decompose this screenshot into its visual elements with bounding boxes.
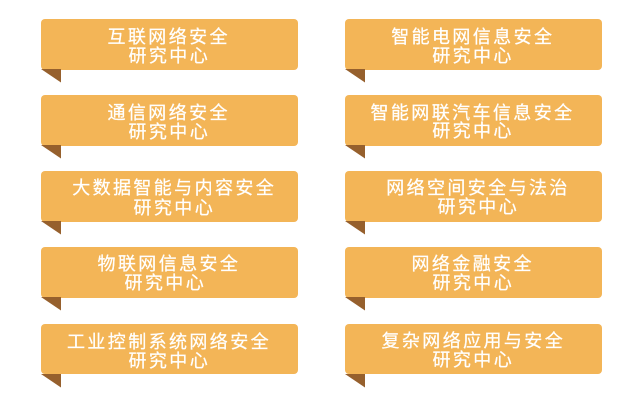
- banner label: 研究中心: [438, 197, 519, 217]
- banner label: [345, 19, 602, 70]
- ribbon fold: [41, 297, 61, 310]
- ribbon fold: [41, 374, 61, 388]
- ribbon fold: [345, 69, 365, 82]
- banner label: [41, 324, 298, 374]
- banner label: 研究中心: [128, 46, 210, 66]
- banner label: [41, 171, 298, 222]
- card: 智能网联汽车信息安全研究中心: [345, 95, 602, 158]
- card: 网络金融安全研究中心: [345, 247, 602, 310]
- card: 互联网络安全研究中心: [41, 19, 298, 82]
- card: 复杂网络应用与安全研究中心: [345, 324, 602, 388]
- card: 通信网络安全研究中心: [41, 95, 298, 158]
- banner label: 网络金融安全: [412, 254, 534, 274]
- banner label: 研究中心: [128, 122, 210, 142]
- card: 物联网信息安全研究中心: [41, 247, 298, 310]
- banner label: 研究中心: [432, 121, 514, 141]
- ribbon fold: [41, 69, 61, 82]
- card: 智能电网信息安全研究中心: [345, 19, 602, 82]
- banner label: 研究中心: [432, 46, 514, 66]
- banner label: 研究中心: [432, 350, 514, 370]
- banner label: 研究中心: [134, 198, 215, 218]
- card: 工业控制系统网络安全研究中心: [41, 324, 298, 388]
- banner label: [345, 95, 602, 146]
- banner label: 研究中心: [124, 273, 206, 293]
- banner label: 智能电网信息安全: [391, 27, 554, 47]
- banner label: [345, 171, 602, 222]
- card: 网络空间安全与法治研究中心: [345, 171, 602, 234]
- ribbon fold: [345, 374, 365, 388]
- ribbon fold: [345, 145, 365, 158]
- banner label: 智能网联汽车信息安全: [370, 103, 574, 123]
- card: 大数据智能与内容安全研究中心: [41, 171, 298, 234]
- banner label: [345, 247, 602, 298]
- banner label: [41, 95, 298, 146]
- ribbon fold: [41, 221, 61, 234]
- banner label: 物联网信息安全: [98, 254, 240, 274]
- banner label: [345, 324, 602, 374]
- banner label: 通信网络安全: [108, 103, 230, 123]
- banner label: 复杂网络应用与安全: [382, 331, 565, 351]
- banner label: 互联网络安全: [108, 27, 230, 47]
- ribbon fold: [41, 145, 61, 158]
- banner label: 网络空间安全与法治: [386, 178, 570, 198]
- ribbon fold: [345, 297, 365, 310]
- banner label: 研究中心: [432, 273, 514, 293]
- banner label: 大数据智能与内容安全: [72, 178, 276, 198]
- banner label: 工业控制系统网络安全: [67, 332, 271, 352]
- banner label: [41, 247, 298, 298]
- banner label: 研究中心: [128, 351, 210, 371]
- ribbon fold: [345, 221, 365, 234]
- banner label: [41, 19, 298, 70]
